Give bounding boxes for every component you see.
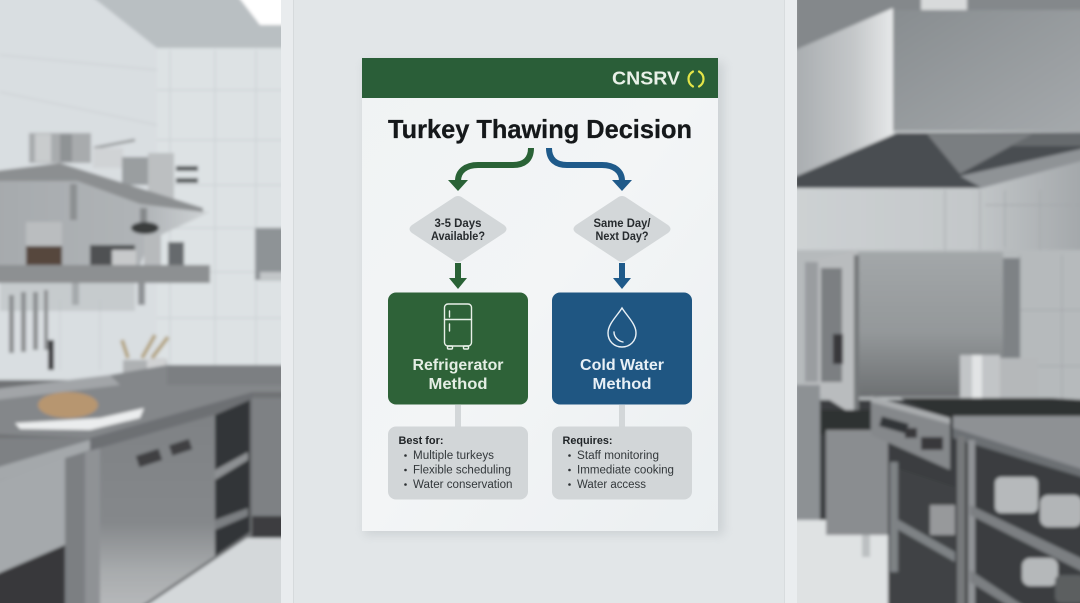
panel: requires: Immediate cooking [577, 464, 674, 476]
background: white wall panel [281, 0, 797, 603]
panel: refrigerator method [388, 292, 528, 404]
logo: CNSRV: CNSRV [612, 68, 681, 88]
wall shadow below upper shelf [0, 181, 210, 265]
panel: best for: Best for: [398, 435, 444, 447]
connector: refrigerator to details [455, 405, 461, 427]
panel: best for: Multiple turkeys [413, 450, 494, 462]
connector: cold water to details [619, 405, 625, 427]
arrow: blue branch to same day [549, 148, 632, 191]
panel: cold water method: Method [592, 376, 652, 393]
decision: same day / next day [574, 196, 670, 262]
background: right kitchen scene [795, 0, 1080, 603]
arrow: green branch to 3-5 days [448, 148, 531, 191]
panel: requires: Requires: [562, 435, 612, 447]
decision: 3-5 days available [410, 196, 506, 262]
icon: water drop [608, 308, 636, 347]
panel: best for: Water conservation [413, 479, 512, 491]
panel: best for [388, 426, 528, 500]
panel: requires: Staff monitoring [577, 450, 659, 462]
arrow: blue down [613, 263, 631, 289]
panel: best for: Flexible scheduling [413, 464, 511, 476]
poster: thawing decision flowchart [362, 58, 718, 531]
panel: requires [552, 426, 692, 500]
decision: 3-5 days available: 3-5 Days [434, 218, 482, 230]
poster shadow [364, 62, 724, 535]
poster sheet [362, 58, 718, 531]
background: left kitchen scene [0, 0, 285, 603]
title: Turkey Thawing Decision [388, 114, 692, 144]
panel: cold water method: Cold Water [580, 357, 664, 374]
backsplash and counter top [0, 365, 285, 438]
header bar [362, 58, 718, 98]
panel: cold water method [552, 292, 692, 404]
cabinets [0, 458, 65, 575]
panel: requires: Water access [577, 479, 646, 491]
decision: 3-5 days available: Available? [431, 231, 485, 243]
decision: same day / next day: Same Day/ [594, 218, 651, 230]
panel: refrigerator method: Refrigerator [412, 357, 504, 374]
decision: same day / next day: Next Day? [596, 231, 648, 243]
panel: refrigerator method: Method [428, 376, 488, 393]
arrow: green down [449, 263, 467, 289]
icon: refrigerator [444, 304, 472, 349]
